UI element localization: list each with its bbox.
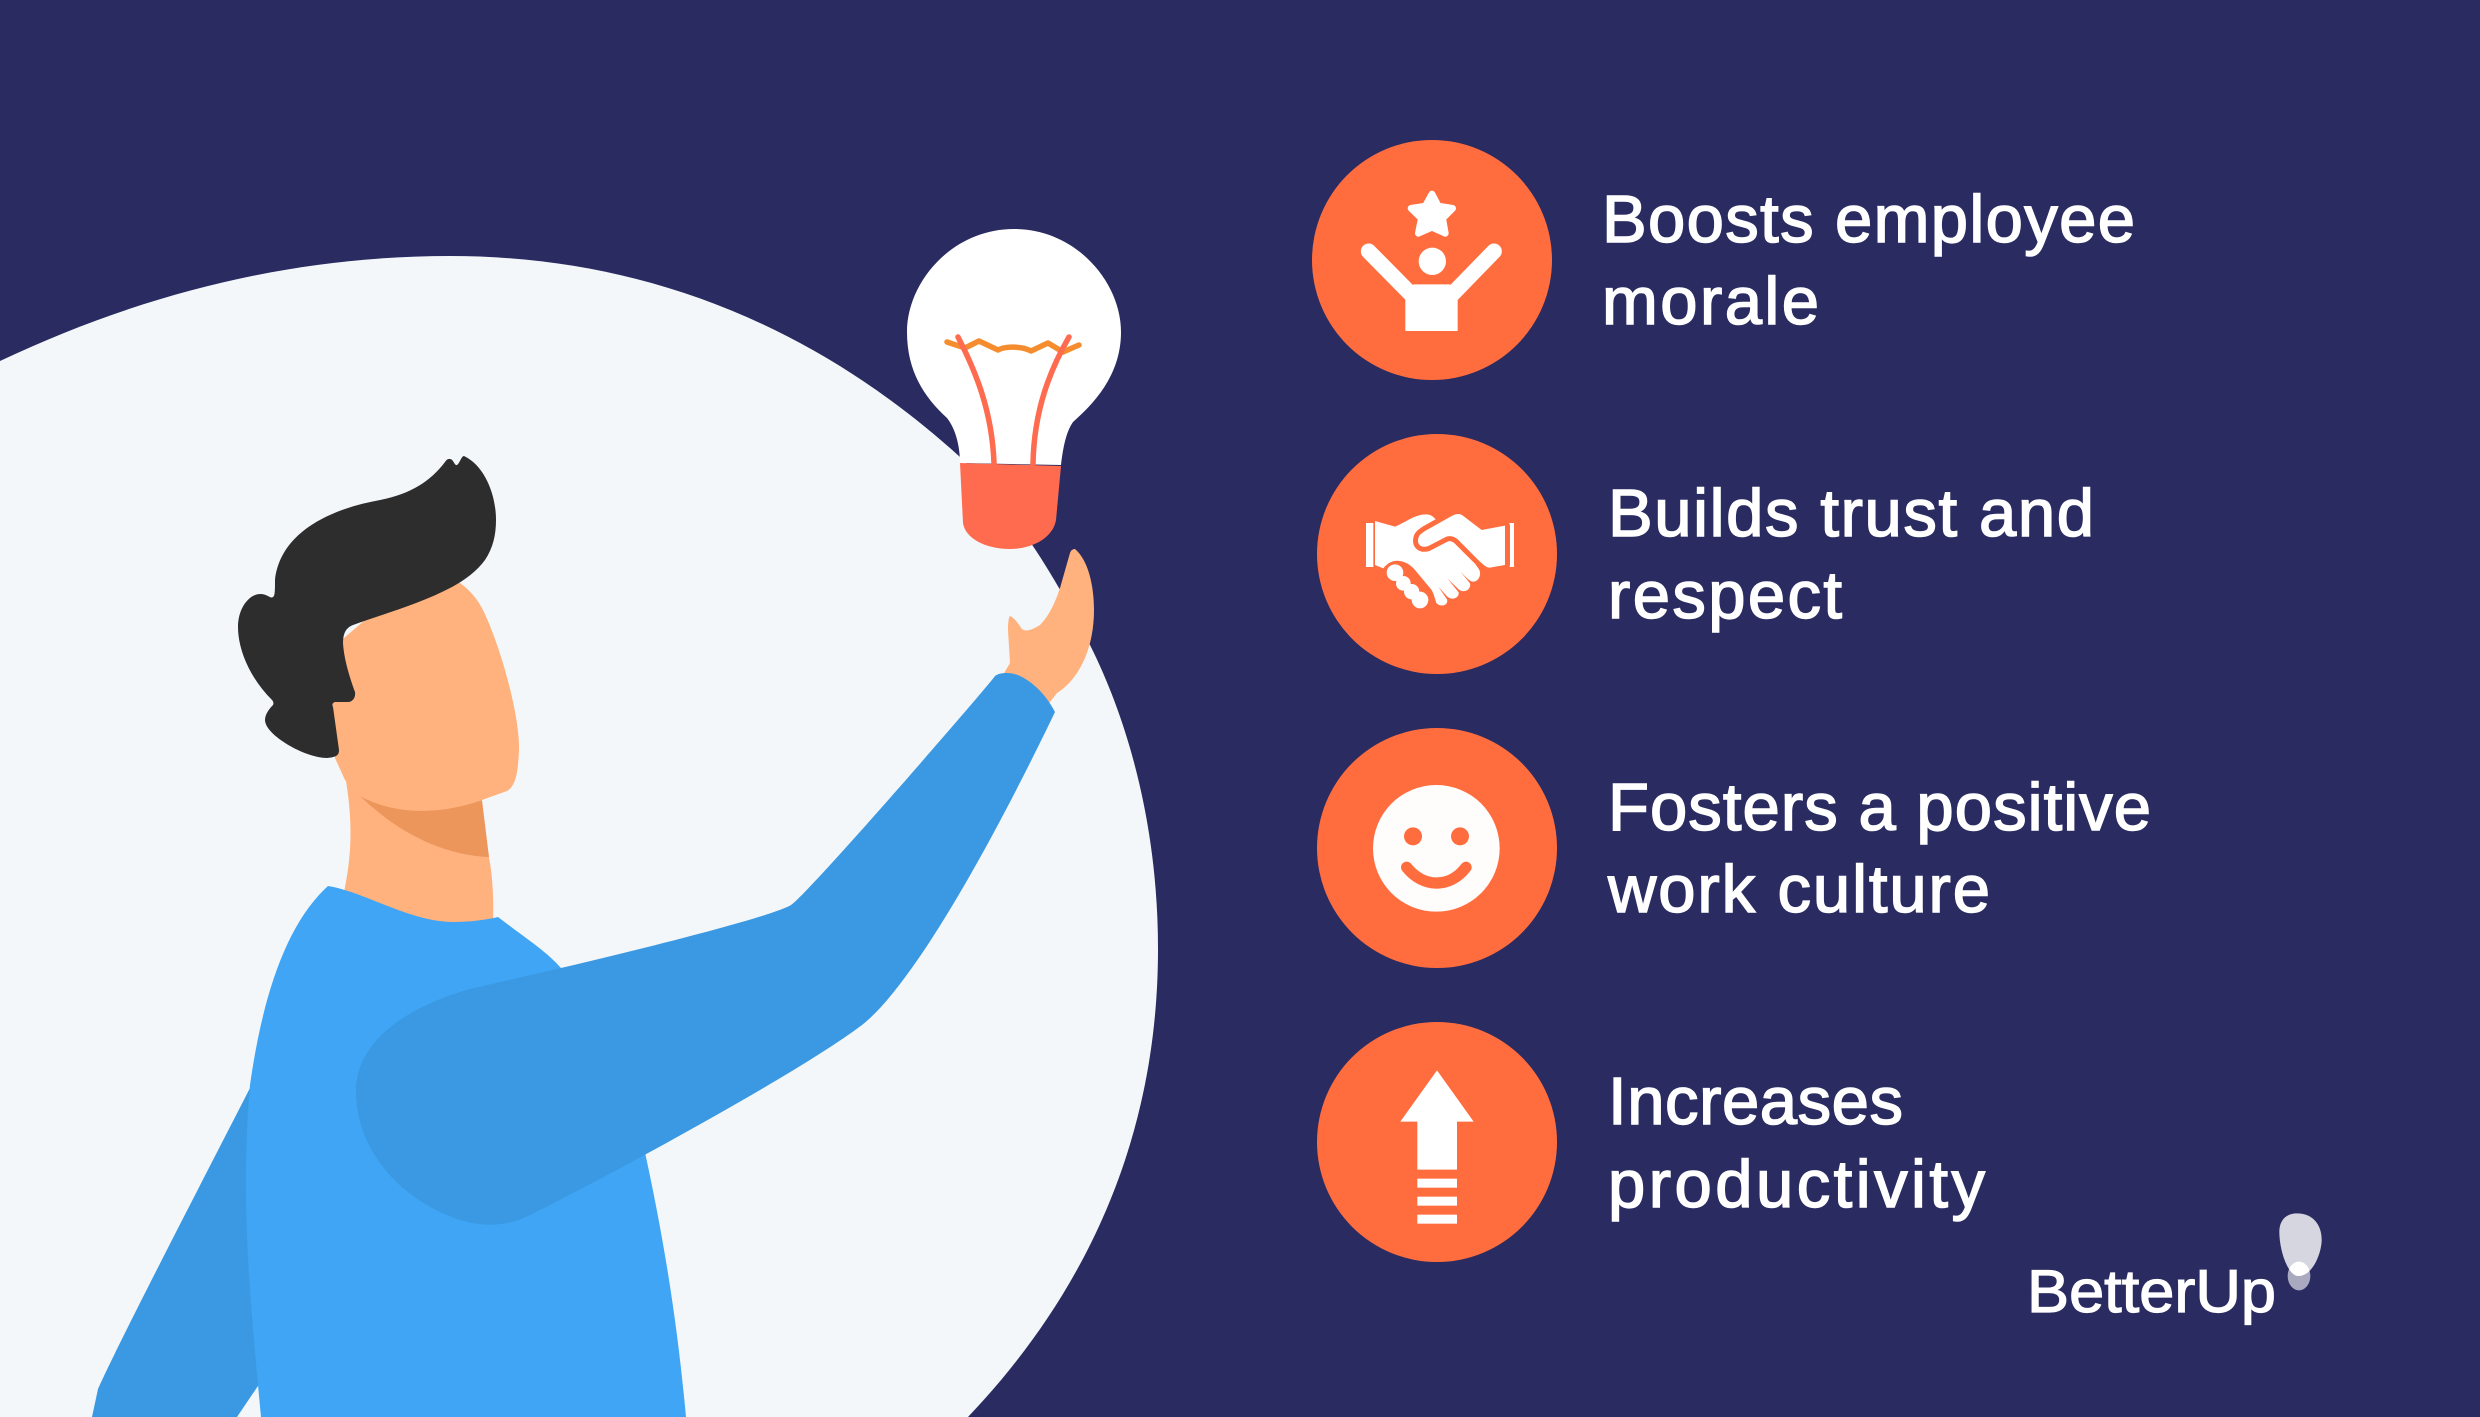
bulb glass (907, 229, 1121, 465)
logo: BetterUp (2027, 1213, 2322, 1325)
text: fosters a positive work culture: Fosters a positive (1608, 770, 2151, 845)
icon: person with star (1312, 140, 1552, 380)
bulb filament (947, 341, 1079, 352)
text: increases productivity: productivity (1608, 1147, 1986, 1222)
logo mark (2279, 1213, 2322, 1290)
bulb wires (958, 337, 1069, 464)
text: builds trust and respect: respect (1608, 558, 1842, 633)
neck shadow (360, 796, 489, 857)
illustration: man holding light bulb (92, 456, 1094, 1417)
benefit 3: fosters a positive work culture (1317, 728, 2151, 968)
back arm (92, 1088, 262, 1417)
benefit 2: builds trust and respect (1317, 434, 2094, 674)
icon: handshake (1317, 434, 1557, 674)
text: boosts employee morale: morale (1602, 264, 1819, 339)
torso (246, 886, 686, 1417)
background blob (0, 256, 1158, 1417)
text: boosts employee morale: Boosts employee (1602, 182, 2135, 257)
light bulb (907, 229, 1121, 549)
logo wordmark: BetterUp (2027, 1258, 2276, 1325)
icon: up arrow (1317, 1022, 1557, 1262)
face (330, 570, 519, 811)
benefit 1: boosts employee morale (1312, 140, 2135, 380)
neck (344, 775, 493, 950)
text: fosters a positive work culture: work culture (1607, 852, 1990, 927)
bulb base (960, 463, 1061, 549)
hair (238, 456, 496, 758)
hand (1000, 549, 1094, 715)
text: builds trust and respect: Builds trust and (1608, 476, 2094, 551)
icon: smiley face (1317, 728, 1557, 968)
benefit 4: increases productivity (1317, 1022, 1986, 1262)
text: increases productivity: Increases (1608, 1064, 1903, 1139)
front arm (356, 673, 1055, 1225)
